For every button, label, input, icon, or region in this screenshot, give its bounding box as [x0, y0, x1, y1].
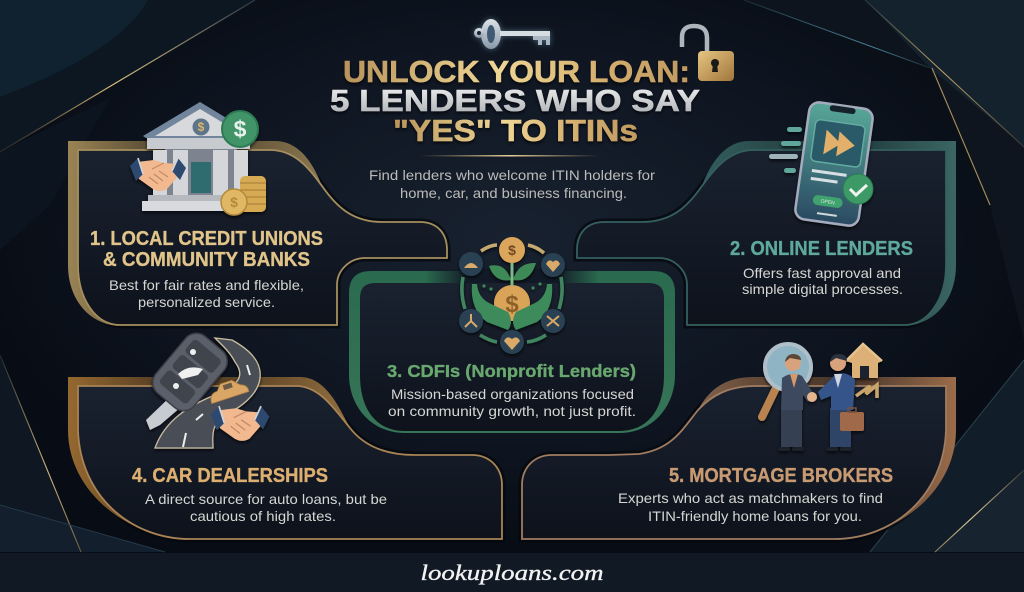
panel frame — [577, 141, 956, 326]
description — [618, 490, 883, 524]
icon: bank: $ — [198, 120, 205, 134]
icon: brokers shaking hands — [762, 344, 882, 451]
description: personalized service. — [138, 294, 275, 310]
description: Offers fast approval and — [743, 265, 901, 281]
panel: car dealerships — [68, 328, 502, 540]
title block — [330, 19, 734, 201]
description: simple digital processes. — [742, 281, 903, 297]
subtitle — [369, 167, 655, 201]
description: Mission-based organizations focused — [391, 386, 634, 402]
panel: CDFIs — [349, 237, 675, 433]
icon: open padlock — [682, 26, 734, 81]
panel: local credit unions — [68, 102, 447, 326]
description: Best for fair rates and flexible, — [109, 277, 304, 293]
heading: 4. CAR DEALERSHIPS — [132, 465, 328, 487]
heading: 5. MORTGAGE BROKERS — [669, 465, 893, 487]
icon: plant, coins and hands: $ — [505, 291, 519, 318]
icon: plant, coins and hands — [459, 237, 565, 354]
title: UNLOCK YOUR LOAN: — [343, 54, 690, 89]
heading — [90, 228, 323, 271]
footer website: lookuploans.com — [420, 560, 604, 585]
panel frame — [68, 377, 502, 540]
footer bar — [0, 553, 1024, 592]
icon: phone — [769, 101, 874, 227]
description — [109, 277, 304, 310]
icon: phone: OPEN — [820, 199, 835, 206]
subtitle: Find lenders who welcome ITIN holders for — [369, 167, 655, 183]
heading: & COMMUNITY BANKS — [103, 249, 310, 271]
description: on community growth, not just profit. — [388, 403, 636, 419]
description — [388, 386, 636, 419]
title — [330, 54, 700, 148]
title: 5 LENDERS WHO SAY — [330, 83, 700, 118]
heading: 3. CDFIs (Nonprofit Lenders) — [387, 361, 636, 381]
description: Experts who act as matchmakers to find — [618, 490, 883, 506]
panel frame — [68, 141, 447, 326]
icon: key — [474, 19, 550, 49]
panel: mortgage brokers — [522, 344, 956, 540]
panel frame — [349, 269, 675, 433]
panel: online lenders — [577, 101, 956, 326]
subtitle: home, car, and business financing. — [400, 185, 627, 201]
heading: 2. ONLINE LENDERS — [730, 238, 913, 260]
description: ITIN-friendly home loans for you. — [648, 508, 862, 524]
description: A direct source for auto loans, but be — [145, 491, 387, 507]
icon: bank: $ — [234, 116, 247, 142]
icon: car key, road and handshake — [146, 328, 269, 448]
title: "YES" TO ITINs — [393, 113, 638, 148]
description: cautious of high rates. — [190, 508, 336, 524]
description — [145, 491, 387, 524]
description — [742, 265, 903, 297]
panel frame — [522, 377, 956, 540]
icon: bank — [130, 102, 266, 215]
icon: bank: $ — [230, 194, 238, 210]
icon: plant, coins and hands: $ — [508, 242, 516, 258]
heading: 1. LOCAL CREDIT UNIONS — [90, 228, 323, 250]
